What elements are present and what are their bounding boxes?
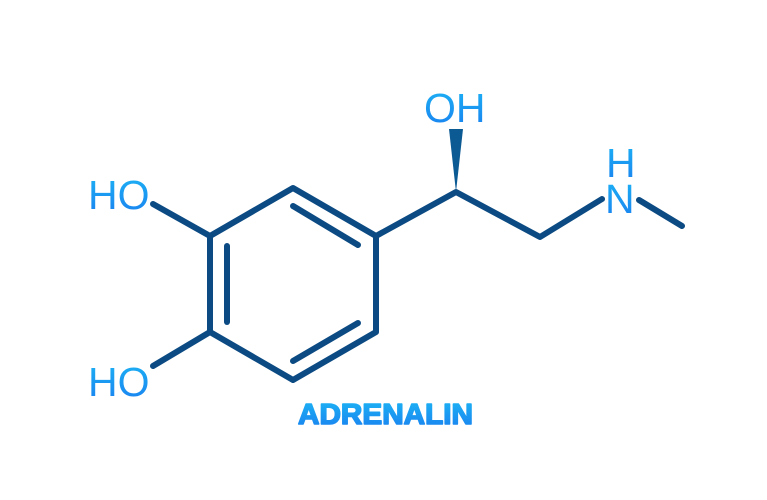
benzene ring [210,188,376,380]
side chain bonds [153,192,682,366]
title: ADRENALIN: ADRENALIN [298,399,473,431]
atom labels: OH [424,85,486,131]
atom labels: HO [88,359,150,405]
atom labels: H [606,140,636,186]
atom labels: N [605,176,635,222]
atom labels: HO [88,172,150,218]
wedge bond [449,129,463,192]
atom labels [88,85,636,405]
